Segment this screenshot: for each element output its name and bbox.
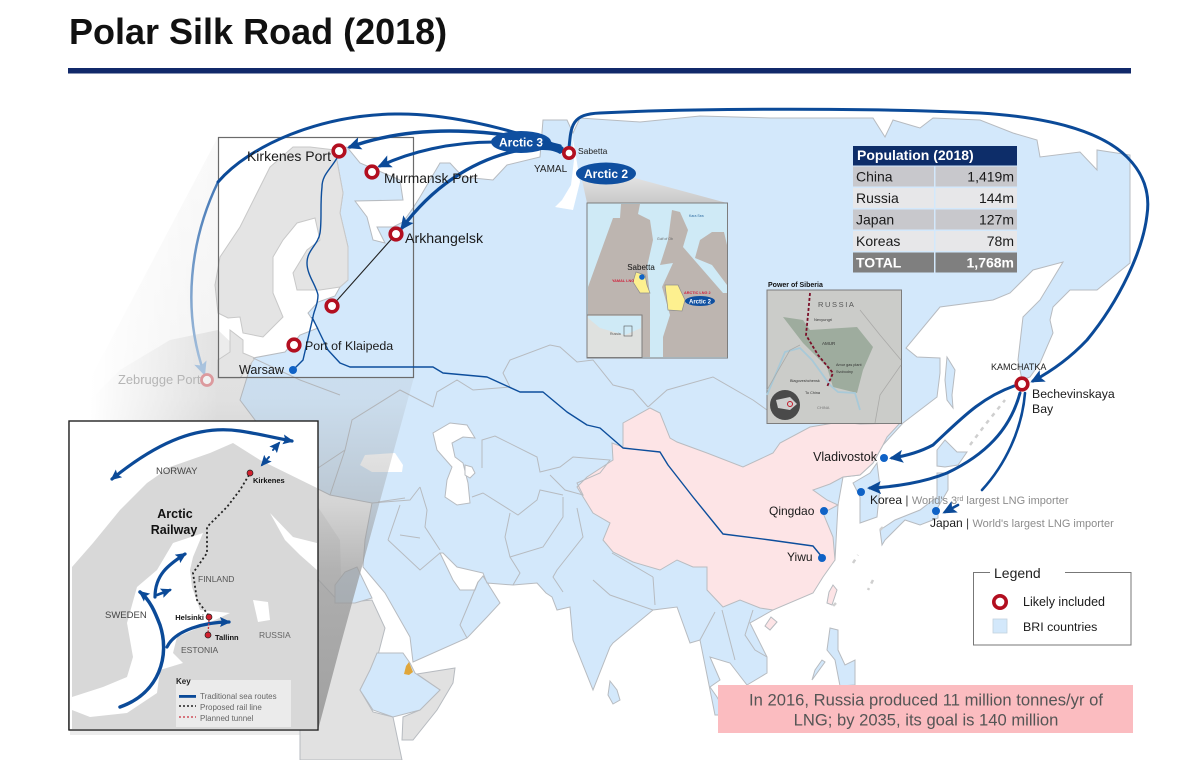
inset labels: ESTONIA	[181, 645, 218, 655]
inset arrow: Baltic trunk	[120, 592, 164, 707]
sea: Black Sea	[360, 453, 403, 472]
land: Taiwan and Hainan	[765, 585, 837, 630]
labels: map places: Arkhangelsk	[405, 231, 484, 247]
table: Population (2018): 127m	[979, 212, 1014, 228]
table: Population (2018)	[853, 146, 1017, 272]
map detail box: Northern Europe	[218, 138, 414, 378]
inset: Power of Siberia: AMUR	[822, 341, 836, 346]
inset: Yamal map: Russia	[610, 332, 621, 336]
inset: Power of Siberia: Power of Siberia	[768, 282, 823, 289]
callout: Arctic 3: Arctic 3	[499, 136, 543, 150]
inset labels: Planned tunnel	[200, 714, 254, 723]
inset arrow: top sea route	[112, 430, 292, 479]
table: Population (2018): Japan	[856, 212, 894, 228]
rail route: Kirkenes to Warsaw	[293, 158, 337, 370]
labels: map places: Japan | World's largest LNG importer	[930, 516, 1114, 530]
inset labels: NORWAY	[156, 466, 198, 477]
inset labels	[105, 466, 291, 723]
table: Population (2018): 78m	[987, 233, 1014, 249]
inset: Yamal map: ARCTIC LNG 2	[684, 291, 711, 295]
inset sea: White Sea	[270, 513, 317, 570]
inset: Power of Siberia	[767, 282, 902, 424]
inset arrow: Kirkenes double arrows	[262, 443, 279, 465]
legend	[974, 565, 1131, 645]
callout: Arctic 3	[491, 131, 551, 153]
inset: Yamal map	[587, 203, 728, 358]
labels: map places: rd	[957, 496, 963, 503]
land: BRI Eurasia	[240, 116, 1130, 715]
labels: map places: YAMAL	[534, 164, 568, 175]
table: Population (2018): Population (2018)	[857, 147, 974, 163]
inset labels: Railway	[151, 523, 197, 537]
inset line: planned tunnel	[208, 620, 209, 634]
land: Sakhalin	[945, 357, 955, 408]
land: Denmark and Germany	[218, 330, 255, 378]
inset line: proposed rail	[193, 475, 249, 616]
connector: Arkhangelsk to Baltic port	[332, 234, 396, 306]
labels: map places: Port of Klaipeda	[305, 339, 393, 353]
land: Korea	[853, 463, 880, 523]
land: Nordic countries	[215, 147, 348, 337]
title rule	[68, 68, 1131, 74]
inset labels: Kirkenes	[253, 476, 285, 485]
rail route: Baltic to Yiwu	[312, 317, 822, 557]
inset labels: Key	[176, 677, 191, 686]
title: Polar Silk Road (2018)	[69, 11, 447, 52]
land: Ethiopia	[360, 653, 440, 717]
inset sea: Baltic	[72, 533, 230, 717]
land: Africa non-BRI	[300, 560, 402, 760]
route arrow: Kamchatka to Vladivostok	[892, 386, 1014, 458]
inset: Power of Siberia: Svobodny	[836, 370, 853, 374]
route arrow: Sabetta to Zebrugge (pale section)	[191, 182, 218, 373]
inset key background	[176, 680, 291, 727]
labels: map places: Zebrugge Port	[118, 372, 201, 387]
inset: Power of Siberia: RUSSIA	[818, 300, 856, 309]
labels: map places: Murmansk Port	[384, 171, 478, 186]
route arrow: Sabetta to Kirkenes	[350, 131, 560, 147]
inset arrow: Gulf of Finland branch	[167, 622, 229, 647]
callout: LNG production: In 2016, Russia produced 11 million tonnes/yr of	[749, 690, 1103, 710]
inset arrow: small branch	[157, 590, 170, 595]
inset: Power of Siberia: CHINA	[817, 405, 830, 410]
land: Sri Lanka	[608, 681, 620, 704]
land: Somalia	[402, 668, 455, 740]
inset labels: Proposed rail line	[200, 703, 262, 712]
callout: LNG production: LNG; by 2035, its goal is 140 million	[794, 710, 1058, 730]
inset lake: Ladoga	[253, 600, 270, 622]
zoom cone: Arctic 2	[582, 170, 727, 203]
table: Population (2018): Koreas	[856, 233, 900, 249]
route arrow: Sabetta to Zebrugge (dark section)	[218, 114, 562, 182]
land: Philippines	[812, 628, 855, 686]
land: Japan	[880, 440, 967, 545]
land: China	[577, 408, 900, 610]
inset labels: SWEDEN	[105, 610, 147, 621]
pins: likely included ports	[202, 145, 1028, 390]
table: Population (2018): 1,768m	[967, 254, 1014, 270]
inset labels: Traditional sea routes	[200, 692, 277, 701]
labels: map places: largest LNG importer	[963, 495, 1069, 507]
labels: map places: Bay	[1032, 402, 1054, 416]
inset arrow: Bothnia branch	[155, 554, 185, 597]
labels: map places: Qingdao	[769, 504, 815, 518]
callout: Arctic 2: Arctic 2	[584, 167, 628, 181]
table: Population (2018): 144m	[979, 190, 1014, 206]
inset: Yamal map: YAMAL LNG	[612, 279, 634, 283]
dashed islands	[830, 400, 1005, 609]
inset: Power of Siberia: Blagoveshchensk	[790, 379, 820, 383]
legend: BRI countries	[1023, 620, 1097, 634]
inset: Yamal map: Sabetta	[627, 263, 655, 272]
table: Population (2018): TOTAL	[856, 254, 902, 270]
labels: map places: Korea | World's 3	[870, 493, 957, 507]
pins: destination cities	[289, 366, 940, 562]
labels: map places: Yiwu	[787, 550, 813, 564]
route arrow: Kamchatka to Japan	[945, 393, 1025, 512]
national borders	[253, 345, 767, 660]
sea: Aral	[465, 465, 475, 478]
table: Population (2018): 1,419m	[967, 168, 1014, 184]
route arrow: Arctic 3 to Arkhangelsk	[402, 150, 520, 228]
labels: map places: Warsaw	[239, 363, 285, 377]
inset: Power of Siberia: To China	[805, 391, 821, 395]
base map	[70, 116, 1130, 760]
route arrow: Kamchatka to Korea	[870, 393, 1020, 488]
route arrow: Sabetta over the Pacific to Kamchatka	[569, 109, 1148, 381]
callout: LNG production	[718, 685, 1133, 733]
inset: Yamal map: Arctic 2	[689, 300, 712, 306]
zoom cone: Europe to Arctic Railway	[68, 137, 414, 730]
inset: Power of Siberia: Amur gas plant	[836, 363, 862, 367]
inset labels: RUSSIA	[259, 630, 291, 640]
labels: map places: Vladivostok	[813, 450, 878, 464]
inset stations	[205, 470, 253, 638]
labels: map places	[118, 146, 1115, 564]
inset: Yamal map: Gulf of Ob	[657, 237, 673, 241]
labels: map places: Sabetta	[578, 146, 608, 156]
labels: map places: Kirkenes Port	[247, 148, 331, 164]
sea: Caspian	[433, 423, 475, 505]
land: non-BRI western Europe	[70, 330, 345, 735]
route arrow: Arctic 3 to Murmansk	[380, 142, 495, 166]
labels: map places: Bechevinskaya	[1032, 387, 1115, 401]
inset labels: Helsinki	[175, 613, 204, 622]
table: Population (2018): Russia	[856, 190, 899, 206]
inset: Power of Siberia: Nevyungri	[814, 317, 832, 322]
land: Egypt	[335, 567, 372, 603]
callout: Arctic 2	[576, 162, 636, 184]
sea: Gulf of Ob	[555, 135, 580, 210]
table: Population (2018): China	[856, 168, 893, 184]
connector: Arctic 3 to Sabetta	[540, 138, 566, 154]
fade left of box	[60, 130, 220, 422]
inset labels: Arctic	[157, 507, 193, 521]
labels: map places: KAMCHATKA	[991, 362, 1046, 372]
inset labels: Tallinn	[215, 633, 239, 642]
marker: Djibouti	[404, 662, 413, 675]
inset land	[72, 443, 317, 729]
inset labels: FINLAND	[198, 574, 234, 584]
inset: Arctic Railway	[69, 421, 318, 730]
inset: Yamal map: Kara Sea	[689, 214, 704, 218]
legend: Likely included	[1023, 595, 1105, 609]
legend: Legend	[994, 565, 1041, 581]
